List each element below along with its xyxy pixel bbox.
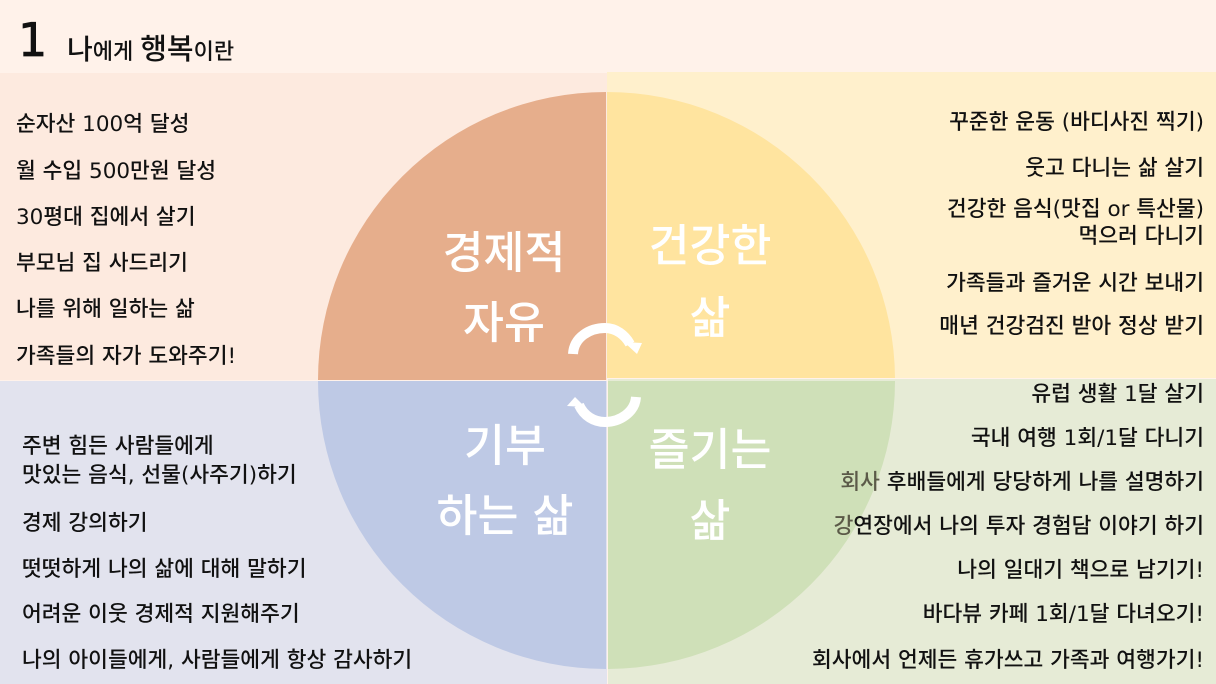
text block: healthy life goals bbox=[939, 110, 1204, 339]
text block: enjoying life goals bbox=[812, 382, 1204, 673]
text block: healthy life goals: 매년 건강검진 받아 정상 받기 bbox=[939, 314, 1204, 339]
text block: economic freedom goals bbox=[16, 112, 236, 369]
title number: 1 bbox=[18, 13, 47, 67]
text block: healthy life goals: 가족들과 즐거운 시간 보내기 bbox=[946, 271, 1204, 296]
text block: giving life goals: 떳떳하게 나의 삶에 대해 말하기 bbox=[22, 557, 306, 582]
heading: economic freedom bbox=[443, 228, 565, 349]
heading: enjoying life: 즐기는 bbox=[649, 425, 771, 476]
panel: enjoying life background bbox=[608, 379, 1216, 684]
text block: giving life goals: 주변 힘든 사람들에게 bbox=[22, 434, 214, 459]
text block: healthy life goals: 건강한 음식(맛집 or 특산물) bbox=[947, 197, 1204, 222]
text block: healthy life goals: 먹으러 다니기 bbox=[1078, 224, 1204, 249]
text block: healthy life goals: 꾸준한 운동 (바디사진 찍기) bbox=[949, 110, 1204, 135]
quadrant: giving life bbox=[318, 381, 606, 669]
heading: enjoying life bbox=[649, 425, 771, 547]
heading: enjoying life: 삶 bbox=[690, 496, 730, 547]
quadrant: economic freedom bbox=[318, 92, 606, 380]
text block: economic freedom goals: 나를 위해 일하는 삶 bbox=[16, 297, 195, 322]
text block: giving life goals: 어려운 이웃 경제적 지원해주기 bbox=[22, 602, 300, 627]
text block: enjoying life goals: 회사 후배들에게 당당하게 나를 설명하기 bbox=[840, 470, 1204, 495]
text block: economic freedom goals: 가족들의 자가 도와주기! bbox=[16, 344, 236, 369]
heading: giving life bbox=[437, 421, 573, 542]
heading: healthy life bbox=[649, 221, 771, 344]
quadrant: enjoying life bbox=[608, 381, 895, 669]
title: 나에게 행복이란 bbox=[67, 32, 234, 66]
text block: giving life goals: 경제 강의하기 bbox=[22, 511, 148, 536]
text block: enjoying life goals: 나의 일대기 책으로 남기기! bbox=[957, 558, 1204, 583]
heading: giving life: 하는 삶 bbox=[437, 491, 573, 542]
arrow: lower clockwise arc bbox=[567, 397, 636, 422]
text block: healthy life goals: 웃고 다니는 삶 살기 bbox=[1025, 156, 1204, 181]
arrow: upper clockwise arc bbox=[573, 328, 642, 354]
text block: enjoying life goals: 바다뷰 카페 1회/1달 다녀오기! bbox=[923, 602, 1204, 627]
text block: enjoying life goals: 강연장에서 나의 투자 경험담 이야기 하기 bbox=[834, 514, 1204, 539]
text block: giving life goals: 맛있는 음식, 선물(사주기)하기 bbox=[22, 463, 297, 488]
heading: healthy life: 삶 bbox=[690, 293, 730, 344]
text block: enjoying life goals: 국내 여행 1회/1달 다니기 bbox=[971, 426, 1204, 451]
heading: economic freedom: 자유 bbox=[463, 298, 545, 349]
heading: healthy life: 건강한 bbox=[649, 221, 771, 272]
panel: healthy life background bbox=[607, 72, 1216, 378]
panel: giving life background bbox=[0, 381, 607, 684]
text block: enjoying life goals: 유럽 생활 1달 살기 bbox=[1031, 382, 1204, 407]
text block: economic freedom goals: 부모님 집 사드리기 bbox=[16, 251, 188, 276]
heading: giving life: 기부 bbox=[464, 421, 546, 472]
text block: economic freedom goals: 월 수입 500만원 달성 bbox=[16, 159, 216, 184]
text block: economic freedom goals: 순자산 100억 달성 bbox=[16, 112, 189, 137]
quadrant: healthy life bbox=[607, 92, 895, 378]
text block: giving life goals bbox=[22, 434, 412, 673]
text block: enjoying life goals: 회사에서 언제든 휴가쓰고 가족과 여행가기! bbox=[812, 648, 1204, 673]
heading: economic freedom: 경제적 bbox=[443, 228, 565, 279]
panel: economic freedom background bbox=[0, 73, 607, 380]
text block: giving life goals: 나의 아이들에게, 사람들에게 항상 감사하기 bbox=[22, 648, 412, 673]
text block: economic freedom goals: 30평대 집에서 살기 bbox=[16, 205, 196, 230]
